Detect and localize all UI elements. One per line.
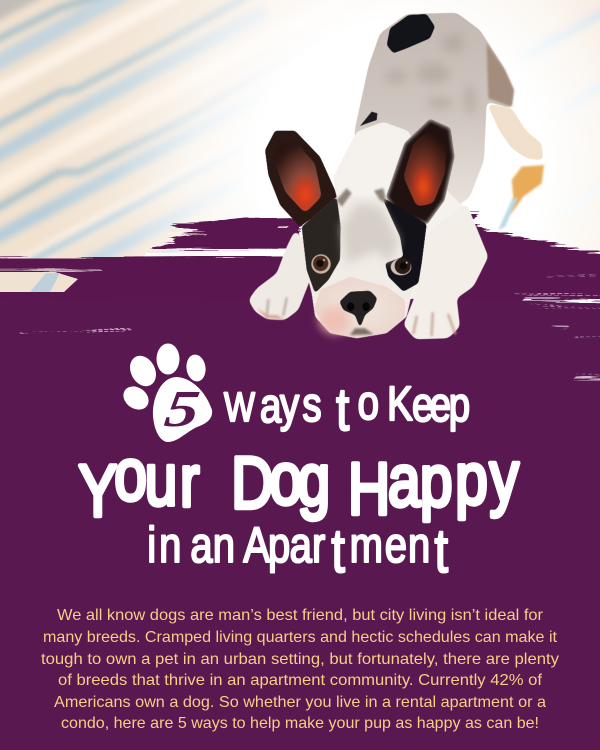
body <box>353 13 514 220</box>
left ear inner <box>273 142 322 213</box>
heading line: in an Apartment: t <box>434 516 449 585</box>
left paw toes <box>267 298 287 317</box>
right black patch <box>382 197 427 292</box>
heading line: Your Dog Happy: o <box>114 435 147 517</box>
heading line: Your Dog Happy: r <box>180 441 199 523</box>
heading line: Ways to Keep: a <box>260 380 282 433</box>
head <box>302 197 427 338</box>
heading line: in an Apartment: a <box>190 517 213 573</box>
right ear <box>387 119 454 224</box>
purple brushed panel <box>0 213 600 750</box>
heading line: in an Apartment: t <box>331 516 345 585</box>
intro paragraph <box>41 607 559 732</box>
small spot <box>360 112 377 126</box>
intro paragraph: condo, here are 5 ways to help make your pup as happy as can be! <box>61 715 539 732</box>
heading line: Your Dog Happy: p <box>455 439 488 521</box>
heading line: Ways to Keep: W <box>224 383 255 430</box>
heading line: in an Apartment: a <box>290 517 313 573</box>
intro paragraph: of breeds that thrive in an apartment community. Currently 42% of <box>58 672 543 689</box>
heading line: in an Apartment: p <box>268 517 290 573</box>
heading line: in an Apartment: e <box>385 517 407 573</box>
right front leg <box>403 203 488 339</box>
pink muzzle blush <box>320 307 350 333</box>
forehead grey fleck <box>342 203 398 263</box>
fur mottling <box>385 34 476 115</box>
heading line: Your Dog Happy: o <box>270 439 302 521</box>
background: blurred wooden floor <box>0 0 600 258</box>
intro paragraph: Americans own a dog. So whether you live in a rental apartment or a <box>54 694 546 711</box>
hind leg <box>487 103 543 161</box>
intro paragraph: tough to own a pet in an urban setting, but fortunately, there are plenty <box>41 651 559 668</box>
left black patch <box>302 197 341 293</box>
white chest <box>333 122 488 300</box>
heading line: in an Apartment: n <box>213 517 235 573</box>
heading line: in an Apartment: A <box>243 517 271 573</box>
heading line: Your Dog Happy: u <box>145 440 177 522</box>
intro paragraph: We all know dogs are man’s best friend, but city living isn’t ideal for <box>57 607 544 624</box>
heading line: Ways to Keep: e <box>412 379 433 432</box>
heading line: in an Apartment: i <box>147 517 156 573</box>
heading line: Ways to Keep: t <box>336 376 349 443</box>
heading line: Your Dog Happy: p <box>420 441 452 523</box>
heading line: Ways to Keep: p <box>449 379 470 432</box>
heading line: Your Dog Happy: y <box>490 437 519 519</box>
right paw toes <box>413 313 455 335</box>
icon: paw print with 5: 5 <box>161 380 203 438</box>
heading line: in an Apartment: r <box>312 517 325 573</box>
reflection of hind paw <box>498 165 544 230</box>
title: 5 ways to keep your dog happy in an apartment <box>78 344 519 585</box>
heading line: Your Dog Happy: a <box>388 441 421 523</box>
heading line: Your Dog Happy: H <box>348 449 390 531</box>
nostrils <box>347 302 370 311</box>
muzzle <box>314 277 405 338</box>
icon: paw print with 5 <box>119 344 212 442</box>
floor seen through the brush <box>0 272 78 292</box>
heading line: in an Apartment: n <box>408 517 430 573</box>
intro paragraph: many breeds. Cramped living quarters and hectic schedules can make it <box>43 629 558 646</box>
nose <box>339 291 377 328</box>
heading line: in an Apartment: m <box>350 517 383 573</box>
heading line: Ways to Keep: K <box>387 378 413 431</box>
right eye <box>391 258 411 275</box>
black spot on back <box>387 14 435 53</box>
heading line: Your Dog Happy: D <box>231 443 273 525</box>
left eye <box>311 254 331 274</box>
heading line: Ways to Keep: o <box>358 377 379 430</box>
heading line: Ways to Keep: s <box>302 379 322 432</box>
heading line: Ways to Keep: y <box>280 379 299 432</box>
heading line: Your Dog Happy: Y <box>78 451 117 533</box>
photo: French bulldog puppy <box>248 13 544 339</box>
heading line: in an Apartment: n <box>159 517 181 573</box>
right ear inner <box>403 128 447 207</box>
heading line: Your Dog Happy: g <box>298 440 330 522</box>
heading line: Ways to Keep: e <box>430 379 451 432</box>
left front leg <box>248 230 317 320</box>
left ear <box>265 131 337 227</box>
ear tufts <box>337 188 387 207</box>
brown thigh <box>487 43 514 107</box>
